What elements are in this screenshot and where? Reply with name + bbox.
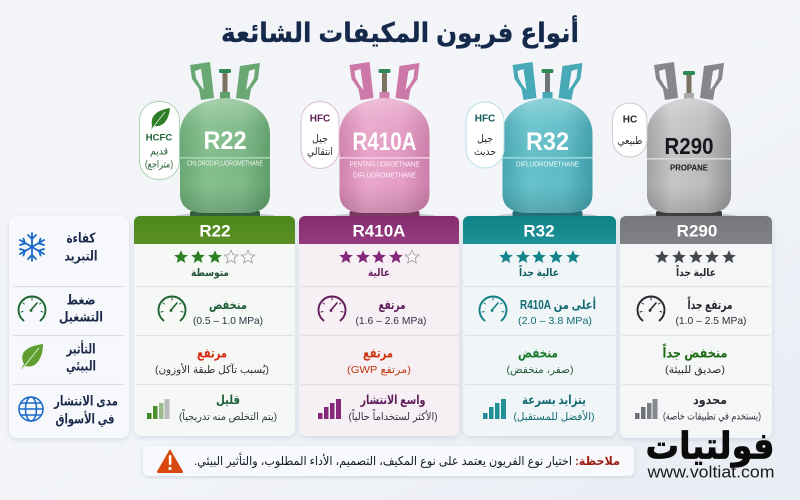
icon: snowflake — [20, 233, 44, 261]
market spread bars — [318, 393, 438, 423]
pressure gauge and value: منخفض — [209, 298, 247, 312]
header: R290 — [677, 222, 717, 240]
logo: Voltiat: فولتيات — [646, 426, 774, 468]
market spread bars — [483, 393, 594, 423]
cylinder: R410A: R410A — [352, 128, 416, 156]
pressure gauge and value: (1.6 – 2.6 MPa) — [356, 315, 426, 327]
cylinder: R410A: PENTAFLUOROETHANE — [350, 162, 420, 168]
cylinder: R22: R22 — [204, 127, 246, 155]
label: environmental impact: البيئي — [66, 358, 96, 374]
icon: warning triangle — [157, 449, 183, 473]
title: أنواع فريون المكيفات الشائعة — [221, 15, 579, 49]
pressure gauge and value — [480, 296, 596, 327]
cylinder: R290 — [642, 62, 736, 219]
label: operating pressure: التشغيل — [59, 310, 103, 324]
pressure gauge and value — [318, 297, 426, 327]
badge: HFC transitional — [301, 102, 339, 168]
cylinder: R32 — [498, 62, 598, 219]
rating: five stars: عالية جداً — [519, 265, 559, 279]
label: operating pressure — [59, 292, 103, 324]
badge: HCFC — [140, 102, 180, 180]
badge: HC natural — [612, 103, 647, 157]
rating: four stars — [339, 250, 419, 279]
market spread bars: يتزايد بسرعة — [522, 393, 586, 407]
header: R22 — [199, 222, 231, 240]
pressure gauge and value: مرتفع — [378, 298, 406, 312]
rating: five stars — [655, 250, 736, 279]
pressure gauge and value: مرتفع جداً — [688, 295, 732, 312]
rating: five stars: عالية جداً — [676, 265, 716, 279]
icon: leaf — [21, 344, 43, 369]
header: R410A — [353, 222, 405, 240]
cylinder: R290: PROPANE — [670, 164, 709, 172]
callout: note — [143, 446, 634, 476]
label: cooling efficiency: كفاءة — [66, 230, 96, 246]
rating: four stars: عالية — [368, 267, 390, 279]
icon: leaf — [151, 108, 170, 130]
header — [620, 216, 772, 244]
environmental impact: (صفر، منخفض) — [506, 364, 574, 376]
logo: Voltiat: www.voltiat.com — [646, 462, 774, 482]
cylinder: R410A: DIFLUOROMETHANE — [353, 172, 416, 180]
pressure gauge and value — [158, 297, 263, 327]
market spread bars — [635, 393, 761, 422]
environmental impact: (مرتفع GWP) — [347, 364, 411, 376]
badge: HFC transitional: انتقالي — [307, 146, 333, 158]
icon: pressure gauge — [18, 297, 46, 320]
badge: HFC modern: HFC — [475, 114, 495, 124]
environmental impact: منخفض — [518, 346, 558, 360]
header — [134, 216, 295, 244]
label: environmental impact — [66, 340, 96, 374]
pressure gauge and value: (2.0 – 3.8 MPa) — [518, 315, 592, 327]
badge: HCFC: HCFC — [146, 132, 172, 144]
market spread bars: (الأكثر لستخداماً حالياً) — [348, 409, 438, 423]
label: cooling efficiency: التبريد — [64, 248, 98, 264]
market spread bars: قليل — [216, 393, 240, 407]
market spread bars: محدود — [693, 393, 727, 407]
environmental impact — [662, 343, 728, 376]
pressure gauge and value: (0.5 – 1.0 MPa) — [193, 315, 263, 327]
environmental impact — [506, 346, 574, 376]
badge: HCFC: قديم — [150, 146, 168, 158]
rating: three stars: متوسطة — [191, 267, 229, 279]
environmental impact: منخفض جداً — [662, 343, 728, 360]
badge: HFC modern: حديث — [474, 146, 496, 158]
label: market spread — [53, 394, 118, 426]
label: market spread: مدى الانتشار — [53, 394, 118, 408]
cylinder: R32: DIFLUOROMETHANE — [516, 162, 579, 168]
pressure gauge and value: (1.0 – 2.5 MPa) — [676, 315, 746, 327]
label: operating pressure: ضغط — [66, 292, 96, 308]
icon: globe — [19, 397, 43, 421]
badge: HFC transitional: جيل — [312, 133, 328, 145]
badge: HFC transitional: HFC — [310, 114, 330, 124]
market spread bars: (يتم التخلص منه تدريجياً) — [179, 409, 277, 423]
panel: row labels — [9, 216, 129, 438]
badge: HC natural: طبيعي — [618, 135, 642, 147]
environmental impact: مرتفع — [363, 346, 393, 360]
badge: HC natural: HC — [623, 114, 637, 126]
badge: HFC modern — [466, 102, 504, 168]
note text: ملاحظة: اختيار نوع الفريون يعتمد على نوع المكيف، التصميم، الأداء المطلوب، والتأثير البيئي. — [194, 452, 620, 469]
cylinder: R22: CHLORODIFLUOROMETHANE — [187, 160, 263, 168]
environmental impact: (صديق للبيئة) — [665, 364, 725, 376]
market spread bars: (يستخدم في تطبيقات خاصة) — [663, 412, 761, 422]
cylinder: R410A — [334, 62, 434, 219]
column: R290 — [620, 216, 772, 438]
header: R32 — [523, 222, 555, 240]
environmental impact — [155, 346, 269, 376]
cylinder: R290: R290 — [664, 133, 714, 159]
market spread bars — [147, 393, 277, 423]
column: R22 — [134, 216, 295, 436]
environmental impact: (يُسبب تآكل طبقة الأوزون) — [155, 363, 269, 376]
badge: HFC modern: جيل — [477, 133, 493, 145]
rating: three stars — [174, 250, 255, 279]
header — [299, 216, 459, 244]
cylinder: R22 — [175, 62, 275, 219]
environmental impact — [347, 346, 411, 376]
label: environmental impact: التأثير — [66, 340, 96, 356]
market spread bars: (الأفضل للمستقبل) — [514, 410, 594, 423]
rating: five stars — [499, 250, 580, 279]
cylinder: R32: R32 — [526, 128, 569, 156]
column: R410A — [299, 216, 459, 436]
environmental impact: مرتفع — [197, 346, 227, 360]
badge: HCFC: (متراجع) — [145, 160, 173, 170]
market spread bars: واسع الانتشار — [360, 393, 426, 407]
label: cooling efficiency — [64, 230, 98, 264]
logo: Voltiat — [646, 426, 774, 482]
column: R32 — [463, 216, 616, 436]
pressure gauge and value — [638, 295, 746, 327]
pressure gauge and value: أعلى من R410A — [520, 296, 596, 312]
label: market spread: في الأسواق — [56, 410, 114, 426]
header — [463, 216, 616, 244]
